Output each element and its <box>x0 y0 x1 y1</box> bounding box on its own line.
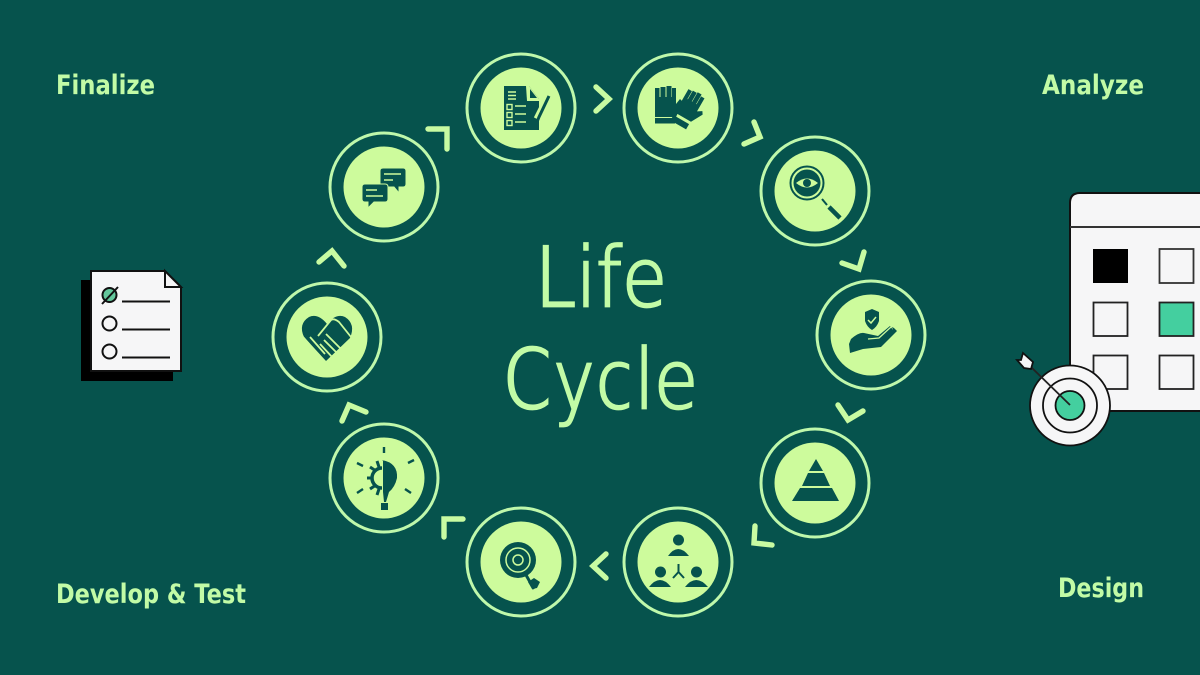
arrow: heart to chat <box>319 251 344 266</box>
arrow: team to target <box>593 554 606 578</box>
arrow: target to bulb <box>444 519 463 537</box>
arrow: eye to hand <box>842 252 864 269</box>
arrow: doc to gloves <box>596 87 609 111</box>
node: team <box>624 508 732 616</box>
node: handshake heart <box>273 283 381 391</box>
node: hand with shield <box>817 281 925 389</box>
illustration: checklist document <box>81 271 181 381</box>
arrow: pyramid to team <box>754 526 772 545</box>
icon: document <box>504 86 549 130</box>
title: Life Cycle <box>503 227 698 431</box>
node: magnifier with eye <box>761 137 869 245</box>
icon: hand and shield <box>849 309 897 353</box>
node: chat bubbles <box>330 133 438 241</box>
node: light bulb <box>330 424 438 532</box>
heading: Finalize: Finalize <box>56 70 155 101</box>
arrow: gloves to eye <box>744 122 760 144</box>
icon: target <box>500 542 540 589</box>
icon: speech bubbles <box>362 168 406 208</box>
icon: bulb and gear <box>357 447 414 510</box>
icon: three people <box>649 534 708 587</box>
icon: pyramid <box>792 459 839 501</box>
node: pyramid <box>761 429 869 537</box>
arrow: chat to doc <box>428 129 447 149</box>
icon: gloves <box>655 86 711 133</box>
title: Life Cycle: Cycle <box>503 329 698 431</box>
title: Life Cycle: Life <box>535 227 667 329</box>
arrow: hand to pyramid <box>838 405 863 420</box>
icon: handshake heart <box>302 316 352 361</box>
illustration: calendar with target <box>1017 193 1200 446</box>
heading: Design: Design <box>1058 573 1144 604</box>
icon: magnifier eye <box>790 166 840 218</box>
heading: Develop & Test: Develop & Test <box>56 579 246 610</box>
node: checklist and pen <box>467 54 575 162</box>
arrow: bulb to heart <box>342 405 366 421</box>
heading: Analyze: Analyze <box>1042 70 1144 101</box>
node: target with arrow <box>467 508 575 616</box>
node: gloves <box>624 54 732 162</box>
